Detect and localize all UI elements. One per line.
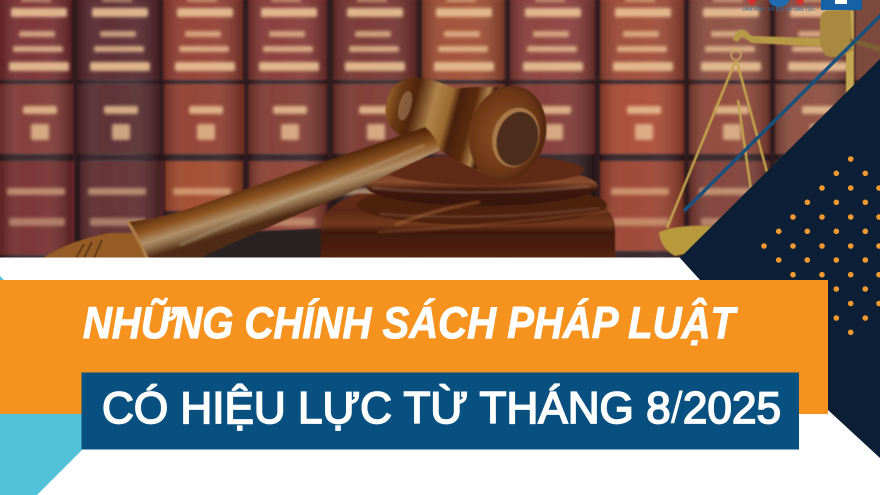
blue subtitle banner <box>82 372 799 450</box>
logo strip at top right <box>742 0 862 13</box>
gavel sound block <box>321 155 615 258</box>
dark navy diagonal shape <box>680 59 880 458</box>
orange title banner <box>0 280 828 414</box>
title line 1: NHỮNG CHÍNH SÁCH PHÁP LUẬT <box>83 298 738 348</box>
table surface <box>200 228 330 258</box>
cyan corner shapes <box>0 276 82 495</box>
gavel head <box>384 77 548 180</box>
thin blue diagonal line <box>684 14 880 211</box>
orange dot pattern <box>761 156 880 335</box>
photo: law books, gavel and scales <box>0 0 880 258</box>
gavel handle <box>43 127 440 258</box>
blurred gold lettering on book spines <box>7 0 848 226</box>
title line 2: CÓ HIỆU LỰC TỪ THÁNG 8/2025 <box>102 384 781 433</box>
brass scales <box>659 10 880 256</box>
law book spines <box>0 0 880 258</box>
logo caption: VĂN HÓA - XÃ HỘI VÀ DÂN TỘC <box>742 6 815 13</box>
